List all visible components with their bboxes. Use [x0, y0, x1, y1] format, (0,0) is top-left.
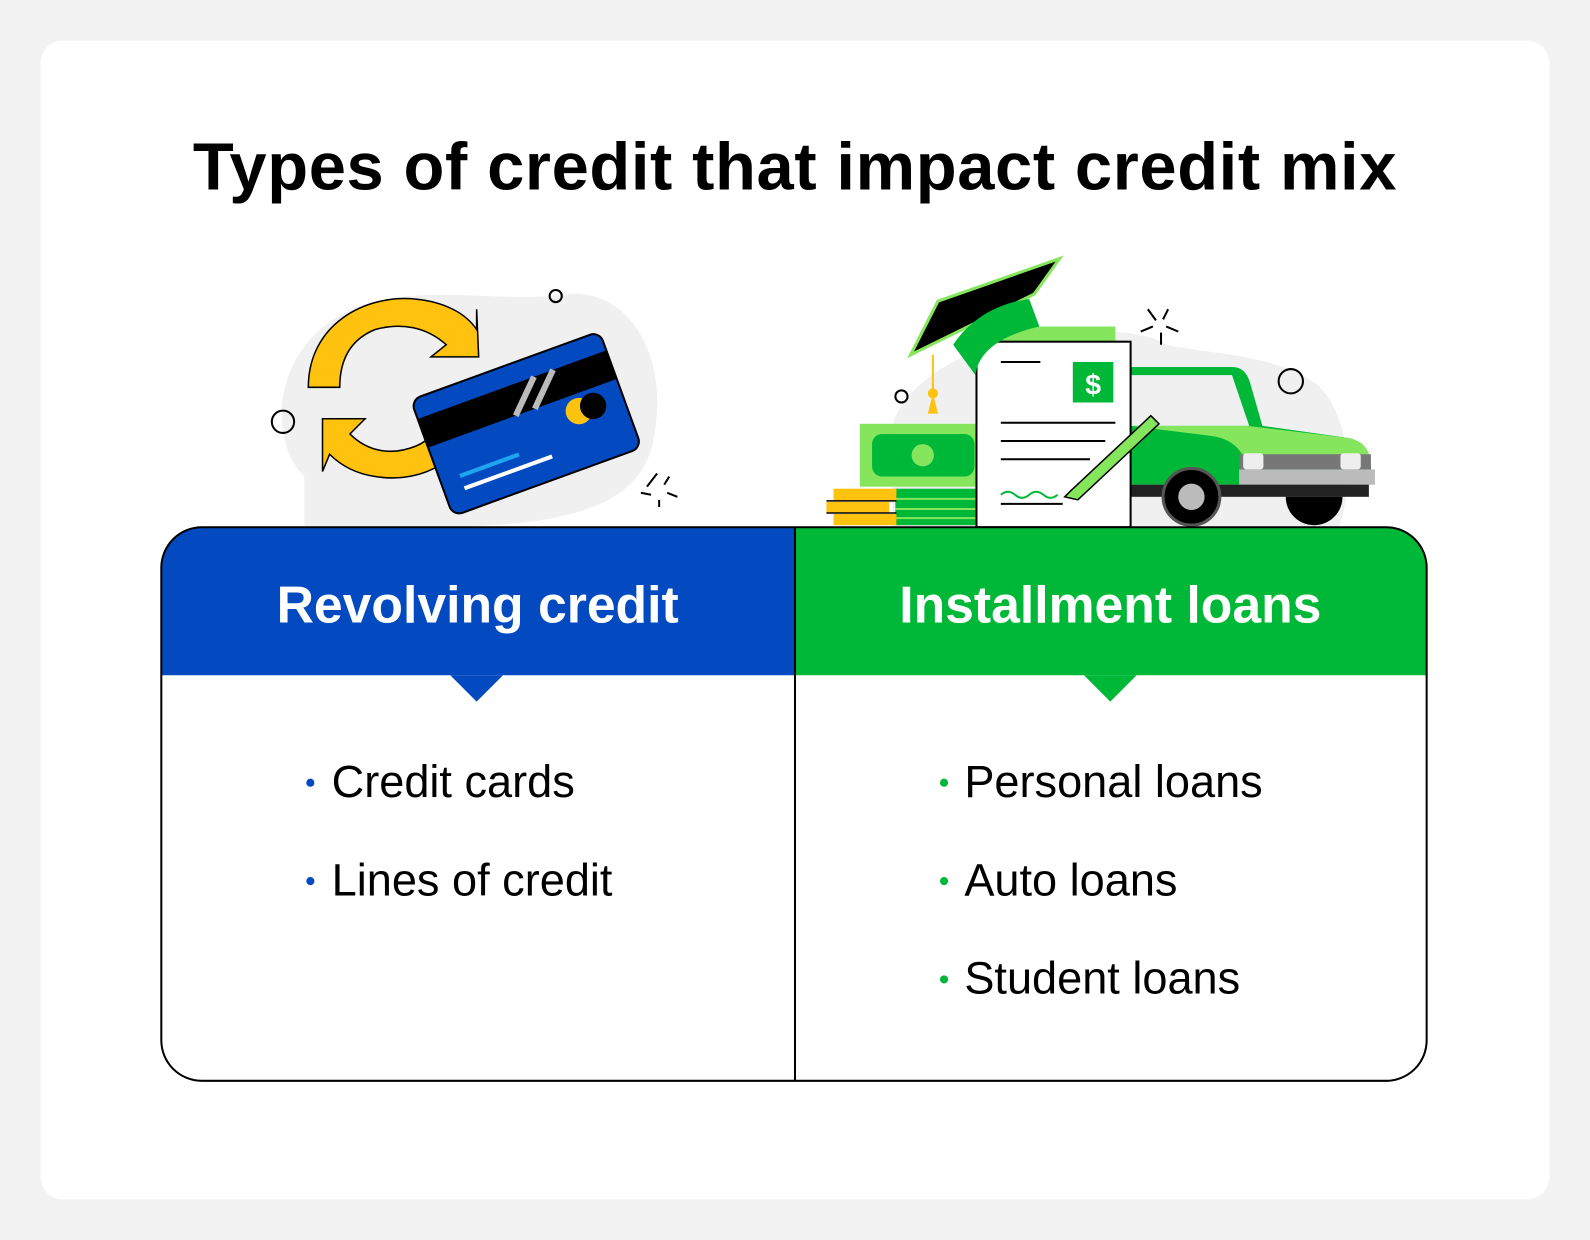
- table panel: Installment loans: [899, 576, 1321, 634]
- table panel: Revolving credit: [277, 576, 679, 634]
- icon: document: [976, 326, 1159, 527]
- arrow: installment pointer: [1084, 675, 1137, 702]
- icon: arrows: [308, 299, 479, 387]
- header: installment loans: [795, 527, 1427, 675]
- list: installment: Student loans: [964, 953, 1240, 1004]
- list: installment: Personal loans: [964, 756, 1263, 807]
- list: installment: [940, 756, 1263, 1004]
- title: Types of credit that impact credit mix: [193, 130, 1397, 205]
- icon: document: $: [1085, 369, 1101, 401]
- list: revolving: Lines of credit: [332, 854, 613, 905]
- list: installment: Auto loans: [964, 854, 1177, 905]
- icon: graduation cap: [911, 259, 1060, 414]
- arrow: revolving pointer: [450, 675, 503, 702]
- header: revolving credit: [161, 527, 795, 675]
- list: revolving: Credit cards: [332, 756, 575, 807]
- table panel: [161, 527, 1427, 1081]
- list: revolving: [306, 756, 613, 905]
- icon: cash and coins: [826, 424, 989, 525]
- illustration: installment loans: [826, 259, 1375, 527]
- icon: car: [1126, 367, 1375, 525]
- illustration: revolving credit: [272, 290, 677, 527]
- icon: credit card: [411, 331, 642, 516]
